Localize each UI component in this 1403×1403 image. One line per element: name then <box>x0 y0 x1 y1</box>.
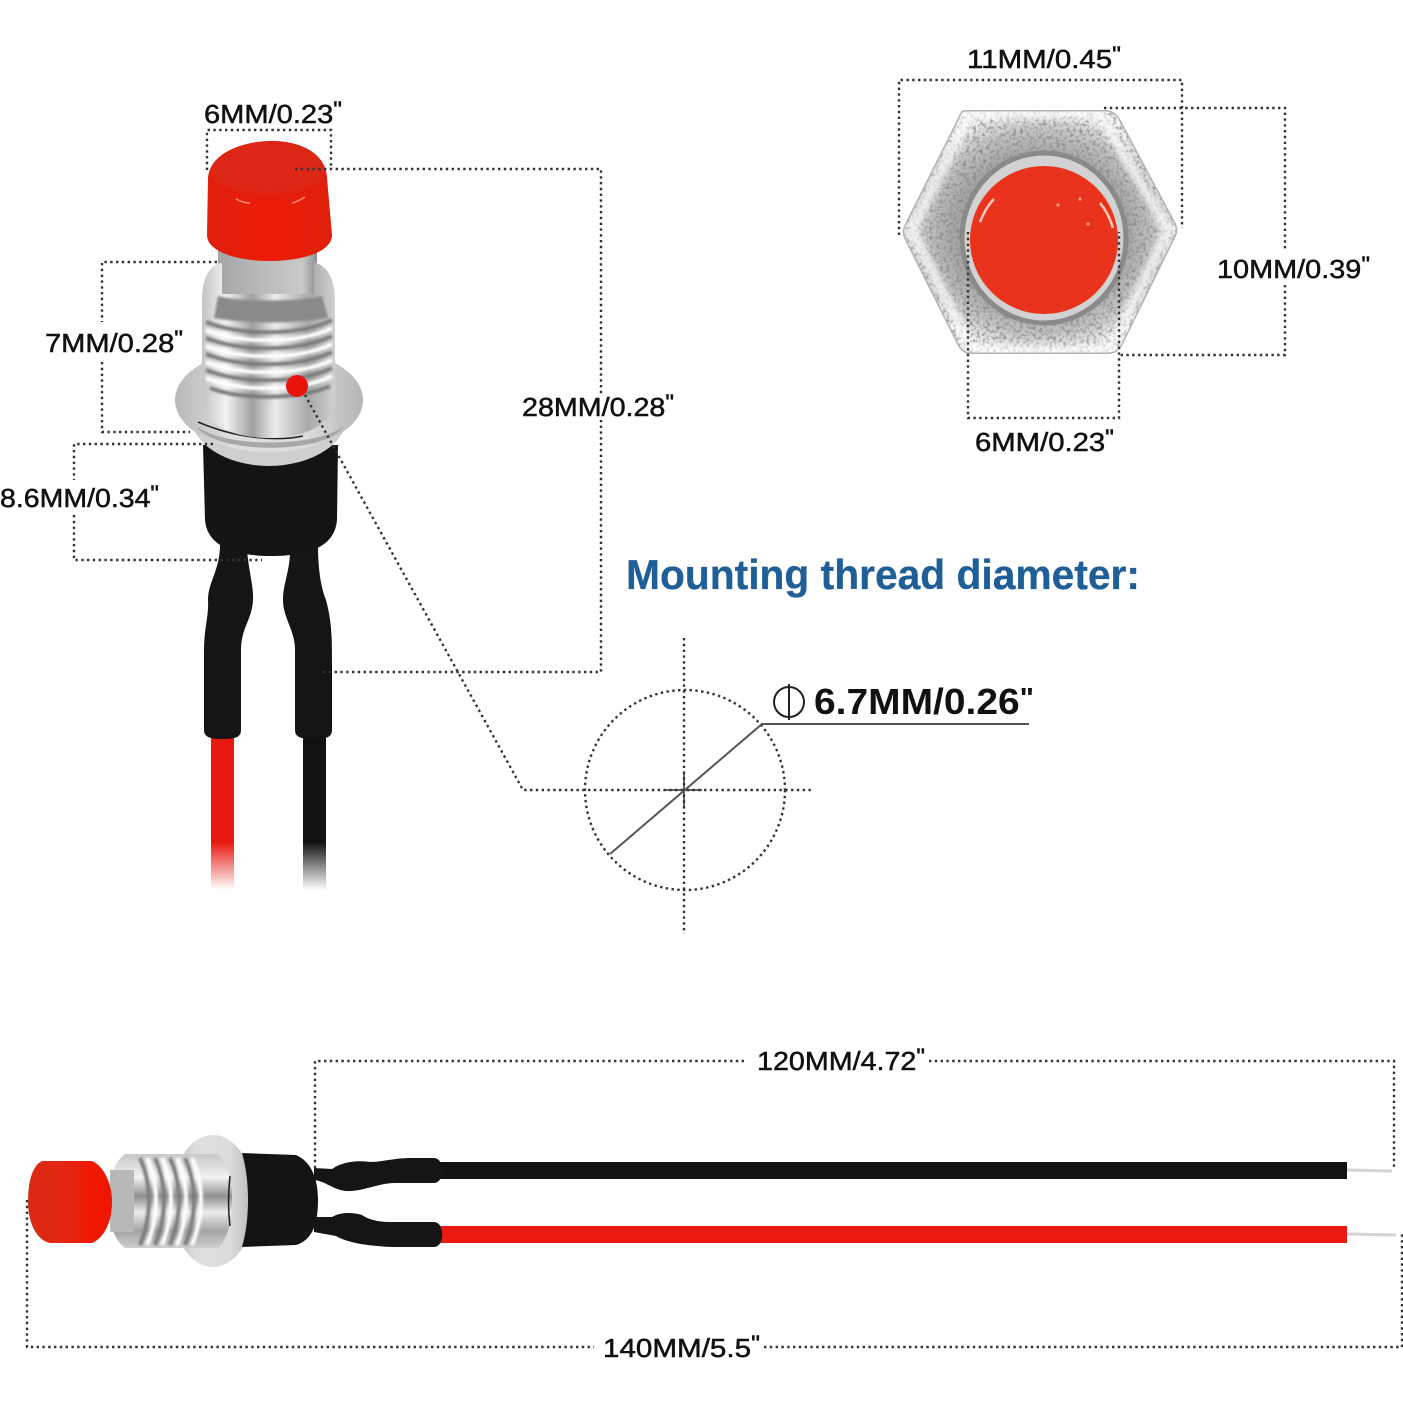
label: button top diameter: " <box>1105 425 1114 450</box>
red cap <box>28 1161 112 1243</box>
left wire: red with fade <box>211 730 234 890</box>
label: thread length: 7MM/0.28 <box>45 328 161 358</box>
label: button top diameter: 6MM/0.23 <box>975 427 1091 457</box>
label: nut width: 11MM/0.45 <box>967 44 1095 74</box>
label: body length: " <box>150 481 159 506</box>
label: overall length: " <box>751 1331 760 1356</box>
dimension lines: vertical switch <box>74 130 812 790</box>
bare wire tips <box>1347 1170 1392 1171</box>
nut top view <box>900 108 1180 356</box>
red wire <box>438 1226 1347 1243</box>
top heat shrink sleeve <box>314 1158 442 1191</box>
black body <box>203 445 338 556</box>
label: nut flat height: " <box>1361 252 1370 277</box>
label: thread length: " <box>174 326 183 351</box>
label: cap diameter: 6MM/0.23 <box>204 99 320 129</box>
label: total height: 28MM/0.28 <box>522 392 652 422</box>
label: nut width: " <box>1112 42 1121 67</box>
right wire: black with fade <box>303 730 326 890</box>
black wire <box>438 1162 1347 1179</box>
thread diameter value: " <box>1020 682 1034 713</box>
vertical switch photo <box>175 135 363 890</box>
plunger stem <box>218 250 317 296</box>
red cap <box>205 135 332 261</box>
label: overall length: 140MM/5.5 <box>603 1333 733 1363</box>
metal flange <box>175 348 363 466</box>
red button top <box>970 166 1118 314</box>
bottom heat shrink sleeve <box>314 1213 442 1247</box>
dimension lines: nut view <box>899 80 1285 418</box>
red marker dot <box>286 375 308 397</box>
plunger stem <box>110 1170 134 1232</box>
label: total height: " <box>665 390 674 415</box>
dimension lines: horizontal switch <box>27 1061 1402 1347</box>
heading: mounting thread diameter: Mounting thread diameter: <box>626 551 1140 598</box>
threaded barrel <box>202 263 335 438</box>
diameter symbol <box>774 684 804 720</box>
label: wire length: 120MM/4.72 <box>757 1046 902 1076</box>
left heat shrink sleeve <box>204 545 253 739</box>
label: nut flat height: 10MM/0.39 <box>1217 254 1347 284</box>
black body <box>242 1153 318 1247</box>
label: body length: 8.6MM/0.34 <box>0 483 137 513</box>
horizontal switch photo <box>28 1135 1396 1267</box>
right heat shrink sleeve <box>283 545 332 739</box>
label: cap diameter: " <box>333 97 342 122</box>
metal flange <box>171 1135 255 1267</box>
threaded barrel <box>108 1154 232 1248</box>
thread diameter diagram <box>585 638 1034 934</box>
thread diameter value: 6.7MM/0.26 <box>814 681 1004 722</box>
label: wire length: " <box>916 1044 925 1069</box>
